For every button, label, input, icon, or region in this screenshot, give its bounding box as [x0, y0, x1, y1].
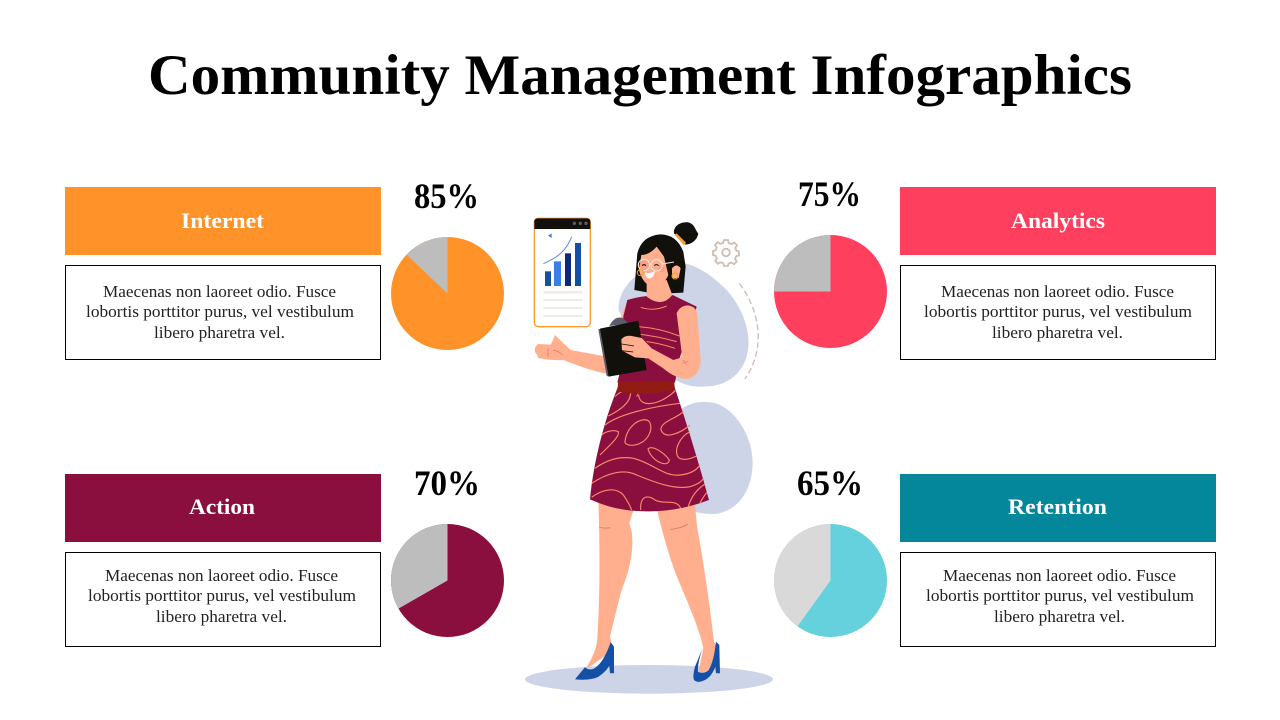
text block: retention: libero pharetra vel. — [994, 607, 1125, 626]
text block: internet — [66, 266, 380, 360]
heading: retention — [900, 474, 1216, 542]
text block: action: Maecenas non laoreet odio. Fusce — [105, 566, 338, 585]
heading: action — [65, 474, 381, 542]
pie chart: action — [391, 524, 504, 637]
heading: analytics: Analytics — [1011, 208, 1105, 233]
text block: internet: libero pharetra vel. — [154, 323, 285, 342]
panel: analytics — [774, 174, 1216, 360]
percent: 75%: 75% — [798, 174, 861, 214]
text block: action: lobortis porttitor purus, vel vestibulum — [88, 586, 356, 605]
heading: analytics — [900, 187, 1216, 255]
title: Community Management Infographics — [148, 44, 1132, 107]
text block: retention: Maecenas non laoreet odio. Fusce — [943, 566, 1176, 585]
percent: 70%: 70% — [414, 463, 480, 503]
legs and shoes — [575, 502, 720, 682]
dress skirt — [590, 382, 709, 511]
text block: analytics — [900, 266, 1216, 360]
pie chart: internet — [391, 237, 504, 350]
text block: internet: lobortis porttitor purus, vel vestibulum — [86, 302, 354, 321]
percent: 85%: 85% — [414, 176, 479, 216]
heading: internet — [65, 187, 381, 255]
text block: analytics: Maecenas non laoreet odio. Fusce — [941, 282, 1174, 301]
percent: 65%: 65% — [797, 463, 863, 503]
head and hair — [634, 222, 698, 302]
panel: action — [65, 463, 504, 646]
text block: analytics: lobortis porttitor purus, vel vestibulum — [924, 302, 1192, 321]
text block: internet: Maecenas non laoreet odio. Fusce — [103, 282, 336, 301]
torso, arms and clipboard — [535, 295, 701, 399]
icon: tablet with bar chart — [534, 218, 590, 327]
text block: retention — [900, 552, 1216, 646]
pie chart: analytics — [774, 235, 887, 348]
text block: action: libero pharetra vel. — [156, 607, 287, 626]
background blobs and floor shadow — [525, 262, 773, 694]
heading: retention: Retention — [1008, 494, 1107, 519]
icon: gear — [713, 240, 739, 266]
heading: action: Action — [189, 494, 255, 519]
heading: internet: Internet — [181, 208, 265, 233]
panel: retention — [774, 463, 1216, 646]
text block: retention: lobortis porttitor purus, vel vestibulum — [926, 586, 1194, 605]
panel: internet — [65, 176, 504, 360]
dashed arc — [739, 283, 758, 379]
illustration: woman with tablet — [525, 218, 773, 694]
pie chart: retention — [774, 524, 887, 637]
text block: action — [66, 552, 380, 646]
text block: analytics: libero pharetra vel. — [992, 323, 1123, 342]
